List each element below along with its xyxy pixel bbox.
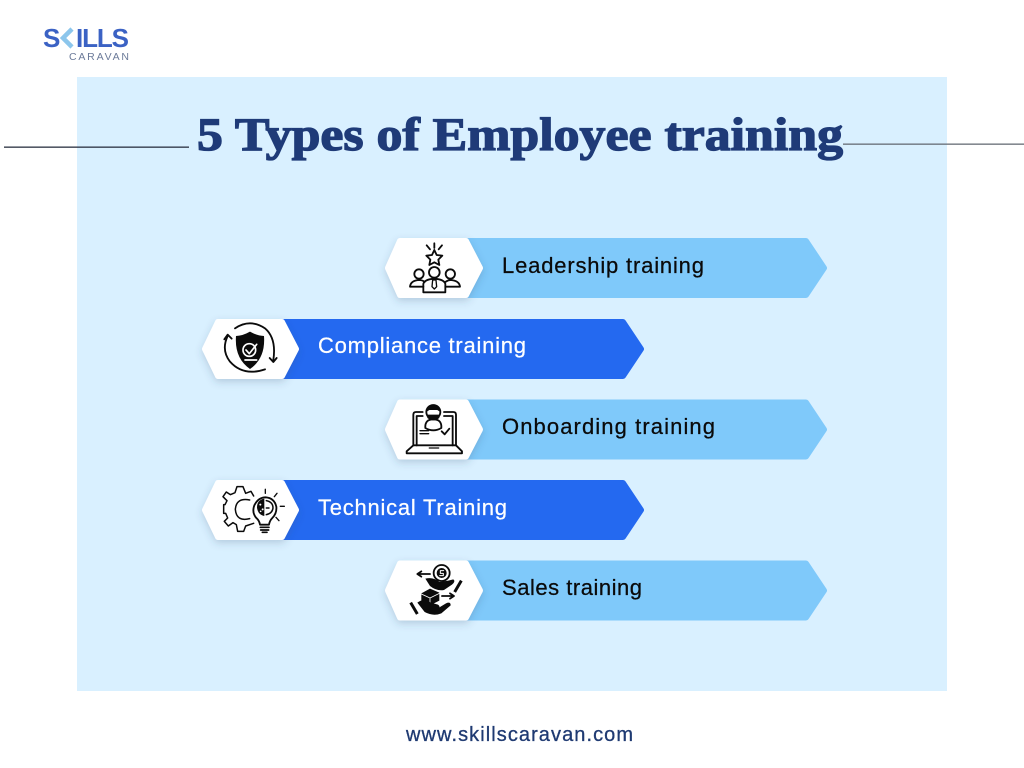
row: Sales training [388, 564, 824, 618]
row: Onboarding training [388, 402, 824, 456]
label: Sales training [502, 575, 643, 600]
hexagon badge [388, 564, 480, 618]
website footer: www.skillscaravan.com [405, 724, 633, 746]
bar [465, 564, 824, 618]
icon: laptop with person [407, 405, 462, 453]
logo: CARAVAN [69, 51, 129, 63]
hexagon badge [388, 241, 480, 295]
label: Onboarding training [502, 414, 716, 439]
row: Compliance training [205, 322, 641, 376]
row: Technical Training [205, 483, 641, 537]
icon: shield with check [224, 323, 277, 372]
label: Compliance training [318, 333, 527, 358]
bar [282, 322, 641, 376]
hexagon badge [205, 483, 296, 537]
right title rule [843, 144, 1024, 145]
logo [43, 23, 129, 63]
row: Leadership training [388, 241, 824, 295]
icon: team leader with star [410, 243, 460, 292]
icon: hands exchanging money and product [411, 565, 461, 615]
label: Technical Training [318, 495, 508, 520]
left title rule [4, 146, 189, 148]
bar [465, 402, 824, 456]
icon: gear and light bulb [223, 487, 284, 532]
bar [282, 483, 641, 537]
label: Leadership training [502, 253, 705, 278]
logo: S [43, 23, 60, 53]
hexagon badge [388, 402, 480, 456]
background panel [77, 77, 947, 691]
hexagon badge [205, 322, 296, 376]
logo: ILLS [76, 23, 129, 53]
bar [465, 241, 824, 295]
title: 5 Types of Employee training [197, 109, 844, 161]
